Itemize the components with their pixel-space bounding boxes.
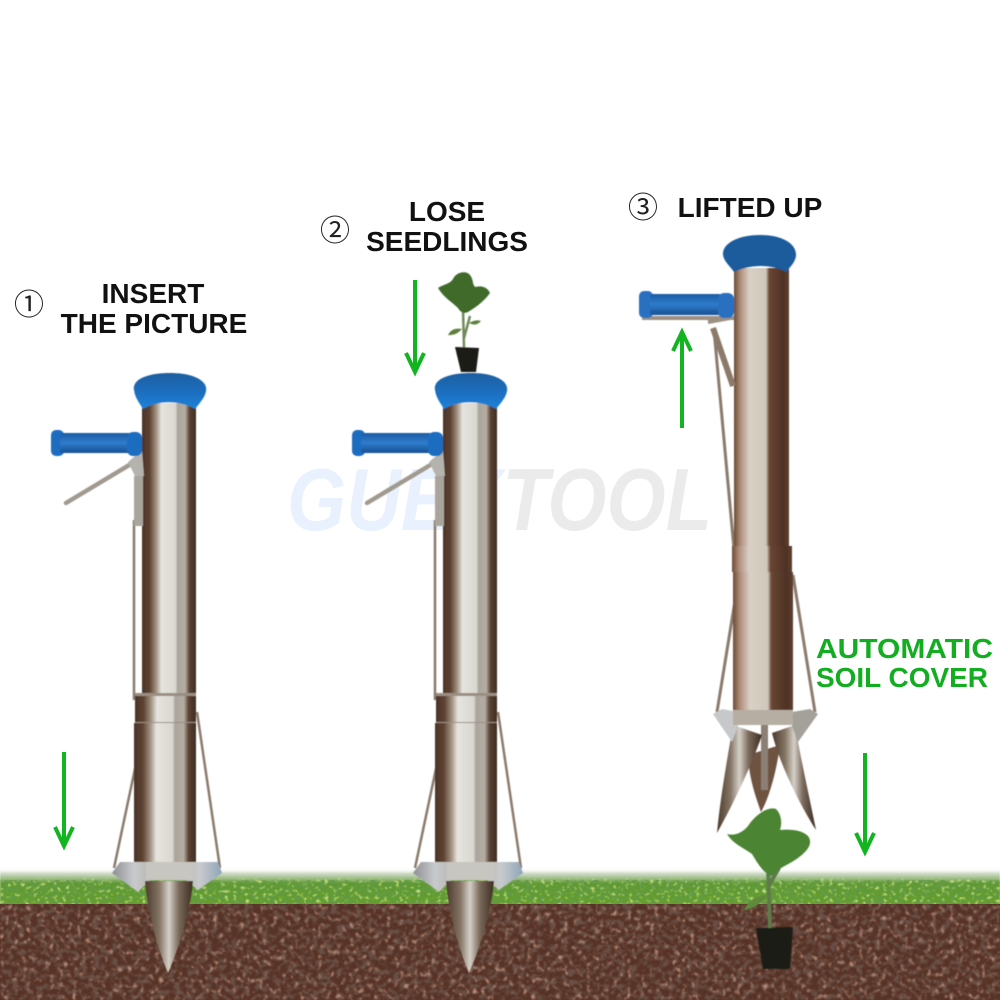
step 1 label — [14, 278, 247, 339]
root ball — [455, 347, 479, 372]
seedling above tool 2 — [438, 272, 490, 372]
step 2 label — [320, 196, 528, 257]
callout: automatic soil cover: AUTOMATIC — [816, 633, 993, 664]
arrow: down, soil cover — [856, 753, 874, 852]
low leaf — [744, 895, 768, 910]
tool 2: planter with seedling dropped — [352, 373, 523, 973]
leaves — [438, 272, 490, 313]
step number: ① — [14, 280, 44, 324]
steel tube — [134, 403, 196, 863]
arrow: down, step 1 — [55, 752, 73, 846]
watermark: GUEXTOOL — [287, 450, 712, 549]
clamp with wings — [713, 709, 818, 742]
clamp with wings — [112, 862, 222, 892]
blue cap — [134, 373, 206, 409]
latch link — [713, 328, 733, 386]
heading: THE PICTURE — [61, 308, 247, 339]
blue cap — [435, 373, 507, 409]
lever — [367, 464, 432, 503]
soil — [0, 904, 1000, 1000]
latch bracket — [429, 450, 445, 526]
spike cone — [446, 881, 494, 973]
blue handle — [51, 430, 142, 456]
centre rod — [761, 725, 768, 790]
lever — [66, 464, 131, 503]
grass strip — [0, 868, 1000, 906]
arrow: up, step 3 — [673, 332, 691, 428]
step number: ② — [320, 206, 350, 250]
latch bracket — [128, 450, 144, 526]
steel tube — [732, 268, 793, 712]
blue cap — [723, 235, 796, 272]
ground: grass and soil — [0, 868, 1000, 1000]
stem — [768, 866, 779, 928]
tool 3: planter lifted — [639, 235, 818, 833]
middle jaw — [748, 745, 780, 812]
leaves — [727, 808, 810, 876]
heading: LIFTED UP — [678, 192, 822, 223]
heading: SEEDLINGS — [366, 226, 528, 257]
clamp with wings — [413, 862, 523, 892]
callout: automatic soil cover: SOIL COVER — [816, 662, 988, 693]
heading: LOSE — [409, 196, 485, 227]
tool 1: planter inserted — [51, 373, 222, 973]
heading: INSERT — [102, 278, 204, 309]
steel tube — [435, 403, 497, 863]
small leaves — [448, 320, 481, 335]
right jaw — [772, 725, 816, 830]
blue handle — [352, 430, 443, 456]
callout: automatic soil cover — [816, 633, 993, 693]
root ball — [756, 927, 793, 969]
step 3 label — [628, 183, 822, 227]
stem — [463, 308, 470, 348]
wire stays — [114, 520, 220, 868]
wire stays — [415, 520, 521, 868]
lever under handle — [642, 318, 734, 322]
wire stays — [714, 330, 815, 712]
seedling planted in soil — [727, 808, 810, 969]
step number: ③ — [628, 183, 658, 227]
spike cone — [145, 881, 193, 973]
blue handle — [639, 291, 734, 318]
arrow: down, step 2 — [406, 280, 424, 372]
left jaw — [717, 725, 762, 833]
